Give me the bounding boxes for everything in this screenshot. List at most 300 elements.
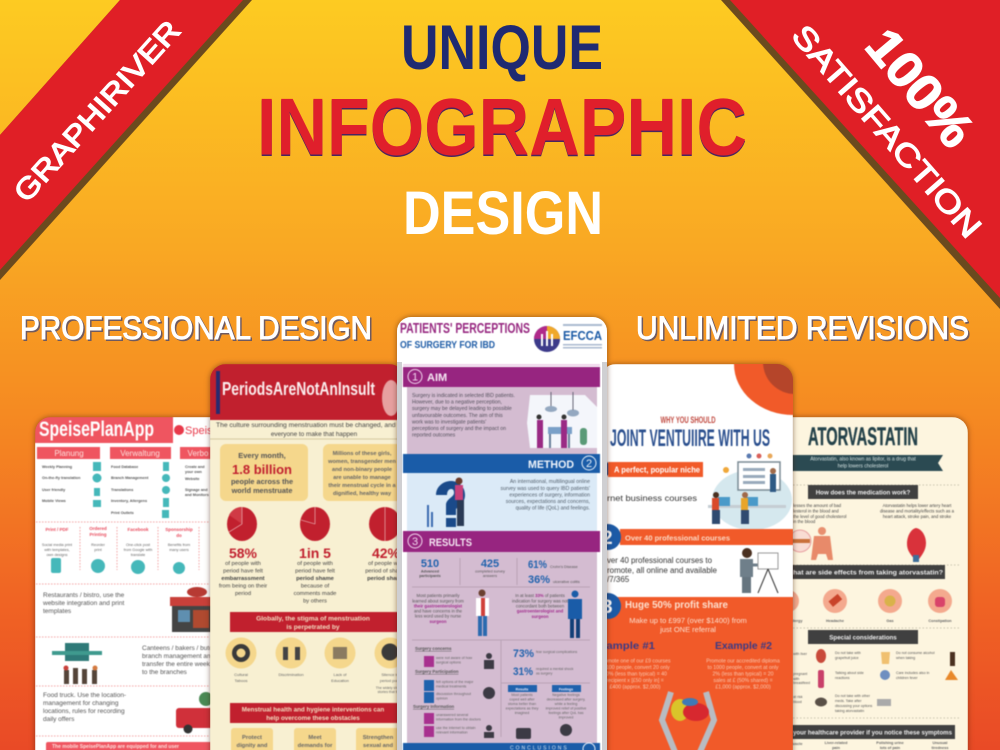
section 1 bar	[607, 461, 704, 478]
section: Results	[403, 531, 600, 747]
footer bar	[46, 742, 216, 750]
feature lists: Weekly Planning	[42, 465, 73, 469]
card header: PeriodsAreNotAnInsult	[222, 379, 375, 399]
explanation text: disease and mortality/effects such as a	[880, 508, 955, 514]
section 2 text	[607, 556, 718, 584]
stat percentages: 58%	[229, 545, 258, 561]
banner: interventions: Menstrual health and hygiene interventions can	[242, 706, 384, 714]
feature lists: your own	[185, 470, 203, 474]
explanation text: in the blood	[793, 519, 816, 524]
section: Method: METHOD	[528, 459, 574, 471]
ribbon: GraphiRiver: GRAPHIRIVER	[8, 15, 187, 209]
section banners: Verwaltung	[120, 449, 160, 458]
right statistics: fear surgical complications	[536, 650, 577, 654]
icon: artery and body	[789, 527, 833, 560]
section 2 text: /7/365	[607, 575, 630, 584]
feature columns: Sponsorship	[165, 527, 193, 532]
feature columns: many users	[169, 548, 189, 552]
text rows: daily offers	[43, 716, 75, 723]
decorative corner circles	[733, 364, 793, 416]
feature lists: On-the-fly translation	[42, 476, 81, 480]
intervention boxes	[231, 728, 406, 750]
section 2 bar: Over 40 professional courses	[625, 534, 730, 542]
right statistics: Results	[516, 688, 528, 692]
stigma icons: Lack of	[334, 672, 347, 677]
section: Aim: However, due to a negative perception,	[412, 400, 502, 406]
results text: information sources: surgeon	[430, 619, 447, 624]
text rows: transfer the entire week	[142, 661, 211, 668]
example text: 20% (less than typical) = 40	[603, 672, 667, 678]
right statistics: 73%	[513, 648, 534, 660]
card header: SpeisePlanApp	[39, 418, 154, 441]
right statistics: decreased after surgery,	[547, 698, 585, 702]
ribbon: GraphiRiver	[0, 0, 252, 280]
right statistics: stoma better than	[508, 702, 536, 706]
right statistics: required a mental shock	[536, 667, 574, 671]
explanation text: heart attack, stroke pain, and stroke	[883, 514, 952, 519]
example text: sales at £ (50% shared) =	[713, 678, 773, 684]
explanation text: lesses the amount of bad	[793, 503, 842, 508]
section 3 panel: 3	[602, 597, 613, 618]
stat captions: period	[235, 591, 251, 597]
feature columns: with templates,	[44, 548, 70, 552]
section 3 panel: just ONE referral	[659, 625, 716, 634]
subheading: professional design: PROFESSIONAL DESIGN	[22, 312, 374, 348]
feature columns: Ordered	[89, 526, 107, 531]
text rows: locations, rules for recording	[43, 708, 125, 715]
subheading: professional design: PROFESSIONAL DESIGN	[20, 310, 372, 346]
banner: stigma: Globally, the stigma of menstruation	[256, 616, 370, 622]
ribbon: 100% satisfaction	[721, 0, 1000, 309]
feature columns: translate	[131, 553, 145, 557]
icon: cafe	[52, 643, 102, 684]
stat box: 1.8 billion: Every month,	[238, 451, 286, 460]
right statistics: Feelings	[559, 688, 573, 692]
results statistics: participants	[419, 574, 441, 578]
icon: doctor in white coat	[476, 590, 489, 636]
stat percentages	[228, 547, 397, 559]
card title	[400, 321, 530, 351]
banner: interventions	[230, 703, 405, 723]
stat box: millions	[322, 444, 397, 502]
text rows: website integration and print	[42, 600, 124, 607]
stat box: millions: women, transgender men	[327, 459, 396, 465]
subheading: unlimited revisions: UNLIMITED REVISIONS	[638, 312, 970, 348]
card title	[610, 416, 770, 447]
dotted dividers	[793, 485, 960, 718]
feature lists: Print Outlets	[111, 511, 134, 515]
panel: Atorvastatin card	[770, 417, 968, 750]
title: Infographic: INFOGRAPHIC	[257, 84, 747, 174]
explanation text: lesterol in the blood and	[793, 508, 839, 514]
section: Aim: 1	[412, 372, 418, 384]
feature lists: Translations	[111, 488, 133, 492]
ribbon: 100% satisfaction: SATISFACTION	[785, 18, 988, 245]
panel: Patients' Perceptions card	[397, 317, 607, 750]
subheading: unlimited revisions: UNLIMITED REVISIONS	[636, 310, 969, 346]
section: Method	[403, 454, 600, 531]
feature columns: Reorder	[91, 543, 106, 547]
stat captions: of people with	[368, 561, 404, 567]
right statistics: coped well after	[509, 698, 535, 702]
example text: 2% (less than typical) = 20	[713, 672, 774, 678]
banner: stigma: is perpetrated by	[286, 624, 340, 631]
stat box: 1.8 billion: world menstruate	[231, 486, 292, 495]
stat captions: period of shame	[365, 568, 407, 574]
surgery lists: relevant information	[436, 730, 468, 734]
stat box: 1.8 billion: 1.8 billion	[232, 462, 292, 477]
text rows: Food truck. Use the location-	[43, 692, 126, 699]
section banners: Planung	[54, 449, 84, 458]
surgery lists: Surgery Participation	[415, 669, 459, 674]
stigma icons: Education	[331, 678, 349, 683]
stat captions: period have felt	[295, 568, 335, 574]
feature columns: Printing	[90, 532, 107, 537]
section: Method: An international, multilingual online	[510, 479, 590, 485]
side effect icons: Constipation	[928, 619, 952, 623]
feature lists: Food Database	[111, 465, 138, 469]
results statistics: Crohn's Disease	[550, 565, 578, 569]
stat box: millions: and non-binary people	[332, 467, 392, 473]
right statistics: expectations as they	[506, 706, 539, 710]
example headings: Example #2	[715, 641, 772, 652]
section 2 text: ver 40 professional courses to	[607, 556, 713, 565]
stigma icons: Cultural	[234, 672, 248, 677]
illustration: team and board	[708, 454, 792, 530]
stat captions	[219, 561, 407, 604]
title: Unique: UNIQUE	[401, 13, 603, 83]
feature columns: Print / PDF	[45, 527, 69, 532]
surgery lists	[413, 646, 495, 738]
section 2 bar	[595, 524, 793, 550]
feature columns	[42, 526, 193, 557]
section: Method: 2	[586, 458, 592, 470]
right statistics: as surgery	[536, 672, 553, 676]
text rows: management for changing	[43, 700, 119, 707]
surgery lists: use the internet to obtain	[436, 726, 476, 730]
icon: surgeon in blue	[568, 590, 582, 638]
stigma icons: The widely shared	[376, 686, 404, 690]
intro text	[216, 422, 406, 438]
bottom symptom labels	[790, 741, 948, 750]
card title: WHY YOU SHOULD	[660, 415, 716, 426]
stat captions: period shame	[367, 576, 406, 582]
stat percentages: 42%	[372, 545, 401, 561]
text rows: Restaurants / bistro, use the	[43, 592, 125, 599]
considerations rows: Talking about side	[835, 671, 864, 675]
panel: Periods Are Not An Insult card	[210, 364, 413, 750]
banner: stigma	[230, 612, 405, 632]
section: Aim: work was to investigate patients'	[412, 420, 486, 426]
section: Aim: perceptions of surgery and the impact on	[412, 426, 506, 432]
results statistics: 510	[421, 558, 439, 570]
icon: restaurant	[170, 587, 214, 632]
section banners	[37, 447, 220, 459]
considerations rows: meds. Take after	[835, 699, 862, 703]
results text: information sources: their gastroenterologist	[414, 604, 463, 608]
section: Aim: unfavourable outcomes. The aim of this	[412, 413, 503, 419]
considerations rows: at risk	[793, 695, 803, 699]
teal icons	[51, 462, 185, 574]
intro text: everyone to make that happen	[271, 431, 358, 438]
stat captions: embarrassment	[221, 576, 265, 582]
feature lists: Inventory, Allergens	[111, 499, 147, 503]
results text: information sources: learned about surgery from	[412, 598, 464, 604]
logo: EFCCA: EFCCA	[563, 328, 603, 343]
title: Infographic: INFOGRAPHIC	[257, 82, 747, 172]
considerations rows: Do not take with	[835, 651, 861, 655]
card header	[210, 364, 405, 420]
considerations rows: breastfeed	[793, 681, 810, 685]
example text	[599, 658, 780, 690]
results text: information sources: gastroenterologist and	[517, 608, 564, 614]
panel: Atorvastatin card: How does the medication work?	[816, 490, 910, 496]
pie charts	[227, 507, 401, 541]
surgery lists: felt options of the major	[436, 680, 474, 684]
stigma icons: Discrimination	[278, 672, 304, 677]
text rows: to the branches	[142, 669, 188, 676]
bottom symptom labels: tiredness	[932, 746, 948, 750]
section: Aim	[403, 367, 600, 454]
stat box: millions: dignified, healthy way	[333, 491, 392, 497]
surgery lists: medical treatments	[436, 684, 467, 688]
section: Aim: Surgery is indicated in selected IBD patients.	[412, 393, 515, 399]
panel: SpeisePlanApp card	[35, 417, 235, 750]
feature columns: do	[176, 533, 182, 538]
bottom symptom labels: Unusual	[933, 741, 947, 745]
feature lists: Mobile Views	[42, 499, 66, 503]
section 1 bar: A perfect, popular niche	[614, 466, 700, 474]
right statistics: improved	[559, 716, 573, 720]
explanation text: Atorvastatin helps lower artery heart	[883, 503, 952, 508]
results text: information sources: less word used by nurse	[415, 614, 462, 618]
example text: to 1000 people, convert at only	[708, 665, 779, 671]
surgery lists: were not aware of how	[436, 656, 473, 660]
bottom symptom labels: Liver-related	[825, 741, 848, 745]
stat box: millions: Millions of these girls,	[333, 451, 392, 457]
results statistics	[412, 558, 590, 737]
card title: PATIENTS' PERCEPTIONS	[400, 321, 530, 337]
panel: Atorvastatin card: hat are side effects from taking atorvastatin?	[793, 570, 943, 576]
footer bar: The mobile SpeisePlanApp are equipped for and user	[52, 744, 179, 750]
ribbon subtitle	[785, 455, 943, 471]
section: Aim: reported outcomes	[412, 432, 456, 438]
surgery lists: unanswered several	[436, 713, 468, 717]
results text: information sources: concordant both between	[516, 604, 565, 608]
stigma icons: Taboos	[235, 678, 247, 683]
section 3 panel: Make up to £997 (over $1400) from	[629, 616, 747, 625]
stat captions: period shame	[296, 576, 335, 582]
side effect icons: Headache	[826, 619, 844, 623]
stat box: millions: their menstrual cycle in a	[328, 483, 396, 489]
considerations rows: reactions	[835, 676, 850, 680]
results statistics: 61%	[528, 559, 547, 571]
stigma icons: period poor	[380, 678, 401, 683]
results text: information sources: In at least 33% of patients	[515, 593, 565, 598]
stat captions: of people with	[225, 561, 261, 567]
icon: heart	[907, 528, 926, 562]
bottom symptom labels: lots of pain	[880, 746, 901, 750]
surgery lists: surgical options	[436, 660, 461, 664]
section: Results: RESULTS	[429, 537, 472, 549]
considerations rows: taking atorvastatin	[835, 709, 864, 713]
stat captions: by others	[303, 598, 327, 604]
section 2 bar: 2	[602, 528, 613, 549]
right statistics	[506, 648, 586, 739]
considerations rows: Care includes also in	[896, 671, 929, 675]
intervention boxes: demands for	[298, 743, 333, 749]
results statistics: 36%	[528, 574, 550, 586]
text rows: branch management and	[142, 653, 215, 660]
card title: JOINT VENTUIIRE WITH US	[610, 425, 770, 452]
section: Aim: surgery may be delayed leading to possible	[412, 406, 512, 412]
right statistics: imagined	[515, 711, 529, 715]
card header: Speise	[185, 425, 219, 437]
section banners: Verbo	[188, 449, 209, 458]
example text: Promote one of our £9 courses	[599, 658, 671, 664]
section: Aim: AIM	[427, 372, 447, 384]
explanation text: the level of good cholesterol	[793, 514, 847, 519]
section 2 text: romote, all online and available	[607, 566, 718, 575]
right statistics: 31%	[513, 666, 533, 678]
considerations rows: children fever	[896, 676, 918, 680]
right statistics: feelings after QoL has	[548, 711, 584, 715]
stat captions: of people with	[297, 561, 333, 567]
right statistics: improved relief of positive	[546, 706, 586, 710]
considerations rows: grapefruit juice	[835, 656, 859, 660]
results text: information sources: indication for surgery was not	[512, 598, 569, 604]
feature columns: own designs	[46, 553, 68, 557]
heading bars	[790, 485, 955, 739]
stigma icons: Silence in	[381, 672, 399, 677]
ribbon subtitle: Atorvastatin, also known as lipitor, is a drug that	[810, 456, 916, 462]
results statistics: ulcerative colitis	[553, 580, 580, 584]
results text: information sources: Most patients primarily	[417, 593, 460, 598]
stat captions: because of	[301, 584, 330, 590]
ribbon: 100% satisfaction: 100%	[855, 18, 985, 158]
feature lists	[42, 465, 209, 515]
stat captions: from being on their	[219, 584, 267, 590]
illustration: operating room	[527, 392, 597, 448]
feature columns: Social media print	[42, 543, 73, 547]
section 3 panel: Huge 50% profit share	[625, 599, 728, 611]
bottom symptom labels: Polishing urine	[876, 741, 904, 745]
intervention boxes: Meet	[308, 735, 322, 741]
example text: recipient x [£50 only in] =	[606, 678, 664, 684]
considerations rows: pregnant	[793, 672, 807, 676]
stigma icons	[226, 638, 406, 694]
considerations rows: Do not take with other	[835, 694, 871, 698]
surgery lists: discussion throughout	[436, 692, 471, 696]
explanation text	[793, 503, 955, 524]
bottom symptom labels: pain	[832, 746, 841, 750]
right statistics: Most patients	[511, 693, 533, 697]
dotted dividers	[36, 522, 210, 736]
feature lists: and Monitors	[185, 493, 209, 497]
panel: Atorvastatin card: Special considerations	[829, 634, 897, 642]
feature columns: Benefits from	[168, 543, 190, 547]
example headings	[600, 641, 772, 652]
feature columns: Facebook	[127, 527, 149, 532]
card title: ATORVASTATIN	[808, 423, 918, 451]
results text: information sources	[412, 593, 569, 624]
example text: £1,000 (approx. $2,000)	[715, 684, 771, 690]
intervention boxes: dignity and	[237, 743, 268, 749]
footer banner	[403, 743, 600, 750]
section 3 panel	[595, 593, 793, 750]
section: Method: sources, expectations and concerns,	[506, 499, 590, 505]
surgery lists: information from the doctors	[436, 718, 481, 722]
example text: £400 (approx. $2,000)	[609, 684, 661, 690]
considerations rows: blood	[793, 700, 802, 704]
intro text: The culture surrounding menstruation must be changed, and we	[216, 422, 406, 429]
considerations rows: discussing your options	[835, 704, 873, 708]
text rows: templates	[43, 608, 72, 615]
results text: information sources: surgeon	[532, 614, 549, 619]
results statistics: answers	[483, 574, 497, 578]
panel: Atorvastatin card: your healthcare provider if you notice these symptoms	[793, 730, 953, 736]
section: Method: survey was used to query IBD patients'	[500, 486, 590, 492]
considerations rows: with	[793, 677, 799, 681]
feature lists: Branch Management	[111, 476, 149, 480]
illustration: trophy pipes	[662, 692, 714, 750]
feature lists: Signage and	[185, 488, 208, 492]
bottom symptom labels: Muscle	[790, 742, 802, 746]
surgery lists: Surgery Information	[413, 704, 454, 709]
intervention boxes: sexual and	[363, 743, 393, 749]
banner: interventions: help overcome these obstacles	[266, 715, 360, 722]
stat captions: period have felt	[223, 568, 263, 574]
considerations rows	[793, 649, 958, 713]
feature columns: from Google with	[124, 548, 152, 552]
feature lists: Website	[185, 477, 200, 481]
right statistics: Negative feelings	[552, 693, 580, 697]
section: Method: experiences of surgery, information	[509, 492, 590, 498]
text rows	[42, 592, 226, 723]
considerations rows: Do not consume alcohol	[896, 651, 935, 655]
stigma icons: stories that they	[378, 690, 403, 694]
considerations rows: when taking	[896, 656, 915, 660]
icon: food truck	[176, 692, 216, 734]
feature columns: print	[94, 548, 103, 552]
text rows: Canteens / bakers / butchers	[142, 645, 226, 652]
stat box: 1.8 billion	[220, 444, 308, 501]
feature lists: User friendly	[42, 488, 66, 492]
logo: EFCCA	[534, 324, 603, 352]
stat box: 1.8 billion: people across the	[231, 477, 293, 486]
illustration: question mark and woman	[427, 478, 465, 527]
results statistics: 425	[481, 558, 499, 570]
results statistics: Advanced	[421, 570, 440, 574]
surgery lists: opinion	[436, 696, 448, 700]
ribbon subtitle: help lowers cholesterol	[838, 464, 888, 470]
stat captions: comments made	[294, 591, 336, 597]
section: Results: 3	[412, 536, 418, 548]
stat percentages: 1in 5	[299, 545, 331, 561]
side effect icons	[777, 589, 952, 623]
results text: information sources: and have concerns in the	[414, 608, 463, 614]
section 1 text: rnet business courses	[607, 494, 697, 503]
results statistics: completed survey	[475, 570, 505, 574]
considerations rows: with liver	[793, 652, 808, 656]
example text: to 100 people, convert 20 only	[600, 665, 670, 671]
panel: Joint Venture card	[607, 360, 797, 750]
stat box: millions: are unable to manage	[333, 475, 391, 481]
example headings: xample #1	[600, 641, 655, 652]
side effect icons: Allergy	[790, 619, 803, 623]
feature columns: One-click post	[126, 543, 151, 547]
section: Method: quality of life (QoL) and feelings.	[516, 506, 590, 512]
